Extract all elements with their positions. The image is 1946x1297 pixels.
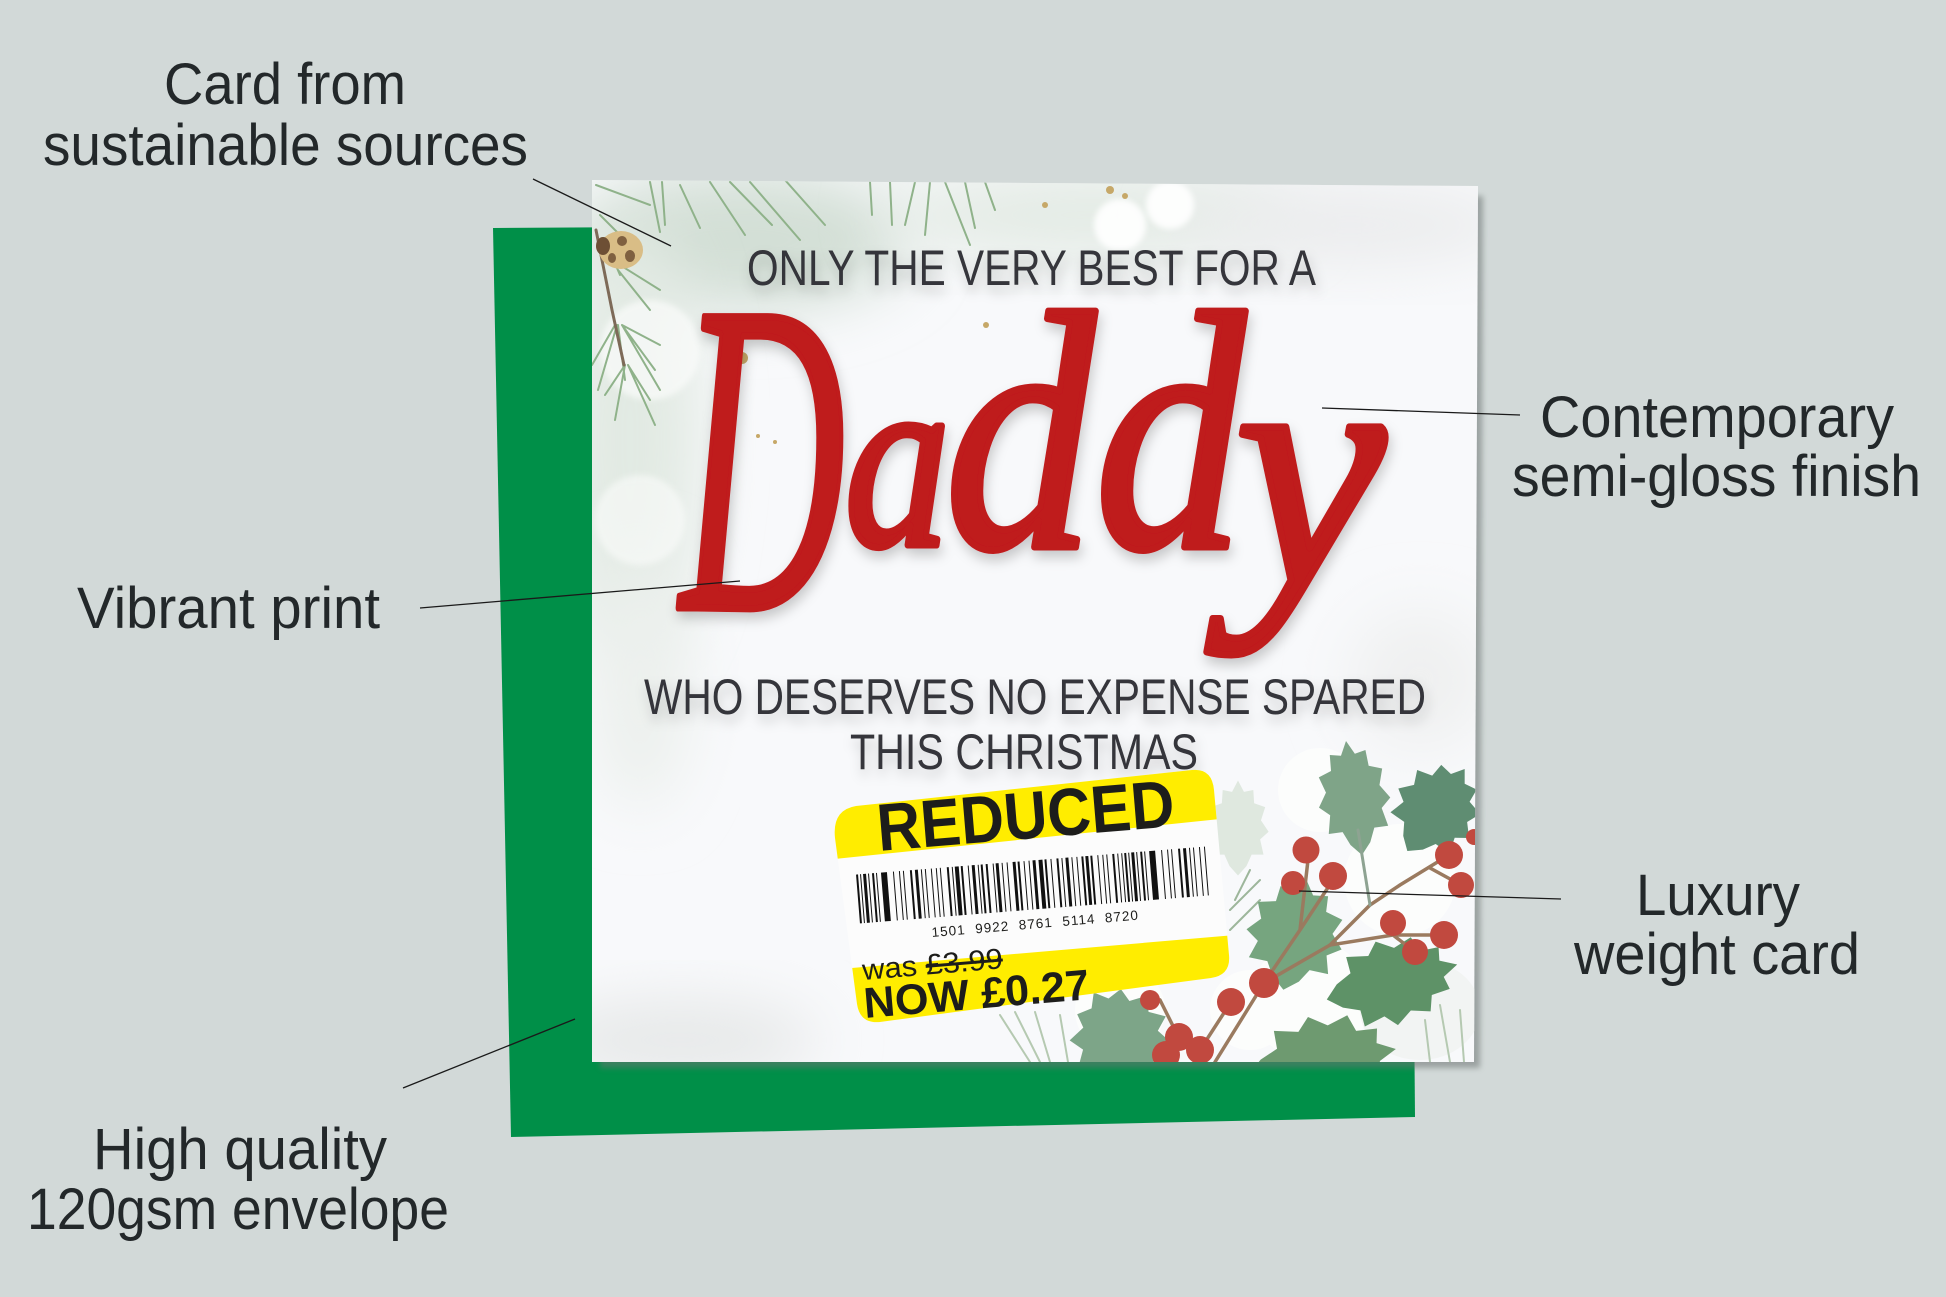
callout: sustainable sources: sustainable sources [43,113,528,178]
sticker: was price: was £3.99 [860,943,1004,987]
card title: Daddy: D [676,212,845,705]
card title: Daddy: y [1203,282,1388,656]
callout: semi-gloss finish: Contemporary [1540,385,1894,450]
card title: Daddy: a [845,319,950,601]
card text: top line: ONLY THE VERY BEST FOR A [747,240,1317,296]
card shadow [600,190,1483,1068]
callout: high quality envelope [27,1019,575,1242]
callout: luxury weight card [1299,863,1860,987]
callout: high quality envelope: High quality [93,1117,387,1182]
sticker: now price: NOW £0.27 [862,961,1091,1028]
callout: luxury weight card: weight card [1573,922,1860,987]
reduced price sticker [834,770,1230,1022]
callout: sustainable sources [43,52,671,246]
card title: Daddy: d [945,244,1100,621]
envelope [493,225,1415,1137]
holly berries [1140,829,1482,1069]
sticker: bottom yellow band [852,936,1230,1022]
callout: vibrant print: Vibrant print [77,576,380,641]
pale background leaf [1216,781,1268,876]
callout: sustainable sources: Card from [164,52,406,117]
pine sprigs: top left [592,180,995,425]
sticker: barcode digits: 1501 9922 8761 5114 8720 [931,908,1139,940]
sticker: barcode [858,871,1207,899]
sticker: top yellow band [834,770,1217,859]
card title: Daddy: d [1095,244,1250,621]
gold flecks [723,186,1128,444]
callout: luxury weight card: Luxury [1636,863,1800,928]
card text: lower lines [644,669,1426,780]
callout: semi-gloss finish: semi-gloss finish [1512,444,1921,509]
card text: lower lines: WHO DESERVES NO EXPENSE SPARED [644,669,1426,725]
holly branches [1160,830,1461,1062]
callout: high quality envelope: 120gsm envelope [27,1177,449,1242]
pine sprigs: bottom [1000,870,1464,1062]
watercolour wash [540,170,1520,1080]
white flower shapes behind holly [1474,989,1475,1032]
card text: lower lines: THIS CHRISTMAS [850,724,1198,780]
callout: vibrant print [77,576,740,641]
greeting card [592,180,1478,1062]
pine cone [596,231,643,269]
holly leaves [1050,736,1500,1121]
sticker: REDUCED heading: REDUCED [874,766,1177,866]
callout: semi-gloss finish [1322,385,1921,509]
